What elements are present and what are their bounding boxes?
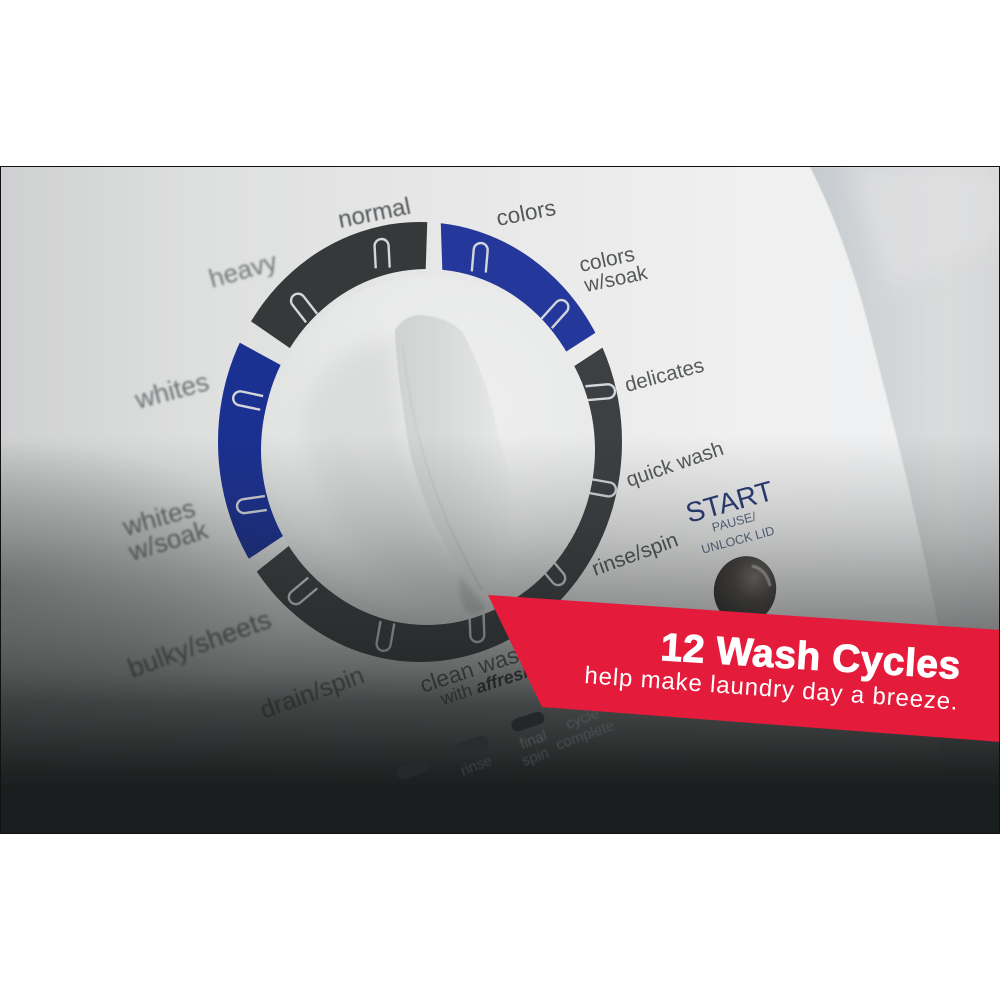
label: bulky/sheets: bulky/sheets: [124, 604, 275, 684]
status indicators: [397, 710, 614, 779]
washer control panel background: [1, 167, 938, 715]
button highlight: [752, 566, 770, 586]
banner subheading: help make laundry day a breeze.: [584, 662, 959, 716]
knob handle inner crease: [414, 419, 482, 590]
cycle tick marks: [232, 239, 617, 652]
start button: [714, 556, 776, 614]
START label: START: [682, 475, 777, 529]
indicator labels: [458, 705, 617, 780]
pause / unlock lid label: [702, 512, 774, 553]
banner shape: [488, 595, 1000, 742]
dial knob: [261, 315, 595, 615]
photo panel: [0, 167, 1000, 833]
infographic: [0, 166, 1000, 834]
photo border: [0, 166, 1000, 834]
label: delicates: delicates: [622, 354, 706, 397]
label: drain/spin: drain/spin: [256, 661, 368, 725]
pause / unlock lid label: PAUSE/: [710, 509, 758, 535]
label: whites w/soak: whites: [118, 493, 199, 542]
label: whites w/soak: w/soak: [124, 514, 212, 567]
knob body: [261, 366, 595, 614]
indicator labels: rinse: [458, 752, 495, 780]
side upper light: [858, 172, 913, 272]
start control: [687, 480, 776, 614]
indicator pills: [395, 710, 546, 781]
label: colors: colors: [494, 195, 558, 231]
pause / unlock lid label: UNLOCK LID: [700, 524, 776, 557]
label: clean wash with affresh: clean wash: [417, 637, 534, 698]
label: clean wash with affresh: [422, 651, 528, 704]
label: colors w/soak: [580, 250, 648, 292]
indicator labels: complete: [554, 717, 617, 754]
label: rinse/spin: rinse/spin: [589, 528, 681, 581]
red banner: [488, 595, 1000, 742]
label: colors w/soak: colors: [577, 243, 637, 277]
indicator labels: spin: [520, 744, 551, 770]
knob handle: [395, 315, 494, 551]
indicator labels: cycle: [564, 705, 601, 733]
label: heavy: heavy: [205, 246, 280, 294]
knob lower shadow: [460, 579, 484, 614]
ring segment: colors: [440, 223, 596, 352]
dark gradient overlay: [0, 435, 1000, 833]
cycle labels: [118, 193, 727, 725]
label: whites: whites: [131, 366, 212, 415]
ring segment: whites: [218, 342, 283, 559]
ring segment: delicates through clean wash: [256, 348, 622, 662]
knob left shading: [307, 344, 445, 572]
banner heading: 12 Wash Cycles: [659, 626, 962, 688]
left vignette: [1, 461, 242, 672]
label: normal: normal: [336, 193, 413, 234]
label: quick wash: quick wash: [623, 437, 727, 492]
label: colors w/soak: w/soak: [581, 261, 650, 297]
dial ring: [218, 222, 622, 662]
indicator labels: final: [518, 727, 549, 753]
washer side edge: [810, 167, 999, 630]
ring segment: normal and heavy: [251, 222, 428, 348]
label: whites w/soak: [122, 502, 210, 561]
panel highlight crease: [733, 167, 925, 600]
label: clean wash with affresh: with affresh: [437, 660, 536, 709]
